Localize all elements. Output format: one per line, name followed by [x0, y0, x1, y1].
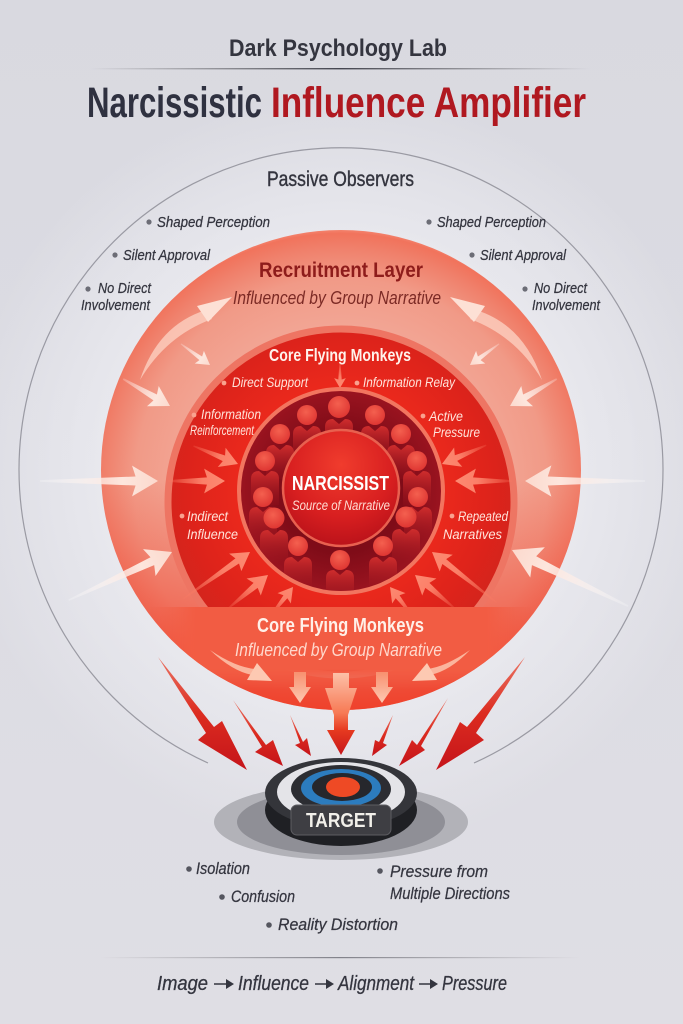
narcissist label: NARCISSIST — [292, 473, 389, 495]
narcissist centre — [283, 430, 399, 546]
main title: Narcissistic — [87, 79, 262, 127]
left observer notes: Involvement — [81, 297, 151, 314]
curved arrow right — [450, 297, 542, 380]
core role labels: Indirect — [187, 509, 229, 524]
main title — [87, 79, 586, 127]
left observer notes — [81, 214, 270, 314]
passive observers heading: Passive Observers — [267, 168, 414, 191]
right observer notes — [426, 214, 601, 314]
core role labels: Information — [201, 407, 261, 422]
panel: passive observers outer ring — [19, 148, 663, 763]
effects on target list: Pressure from — [390, 862, 488, 881]
core heading: Core Flying Monkeys — [269, 345, 411, 365]
effects on target list: Confusion — [231, 887, 295, 906]
effects on target list: Isolation — [196, 859, 250, 878]
left observer notes: No Direct — [98, 280, 152, 297]
left observer notes: Silent Approval — [123, 247, 211, 264]
curved arrow left — [140, 297, 232, 380]
red arrows to target — [158, 657, 525, 770]
panel: inner ring of followers — [239, 389, 443, 604]
lab name: Dark Psychology Lab — [229, 35, 447, 62]
header — [87, 35, 590, 127]
right observer notes: No Direct — [534, 280, 588, 297]
process flow footer: Alignment — [337, 973, 415, 995]
panel: lower core flying monkeys band — [162, 607, 520, 682]
recruitment subtitle: Influenced by Group Narrative — [233, 287, 441, 308]
effects on target list: Multiple Directions — [390, 884, 510, 903]
right observer notes: Involvement — [532, 297, 601, 314]
effects on target list: Reality Distortion — [278, 915, 398, 934]
core role labels: Direct Support — [232, 375, 309, 390]
process flow footer — [157, 973, 507, 995]
core role labels — [180, 375, 508, 542]
process flow footer: Image — [157, 973, 208, 995]
band subtitle: Influenced by Group Narrative — [235, 639, 442, 660]
right observer notes: Silent Approval — [480, 247, 567, 264]
icon: target — [214, 758, 468, 860]
panel: recruitment layer — [101, 230, 581, 710]
central arrow to target — [325, 673, 357, 755]
right observer notes: Shaped Perception — [437, 214, 546, 231]
process flow footer: Influence — [238, 973, 309, 995]
core role labels: Pressure — [433, 425, 480, 440]
core role labels: Repeated — [458, 509, 508, 524]
arrows into inner ring — [168, 361, 512, 623]
recruitment heading: Recruitment Layer — [259, 259, 423, 282]
followers — [249, 396, 432, 604]
panel: core flying monkeys layer — [168, 329, 514, 675]
core role labels: Reinforcement — [190, 423, 255, 438]
left observer notes: Shaped Perception — [157, 214, 270, 231]
narcissist subtitle: Source of Narrative — [292, 498, 390, 513]
core role labels: Information Relay — [363, 375, 456, 390]
process flow footer: Pressure — [442, 973, 507, 995]
core role labels: Influence — [187, 527, 238, 542]
arrows into recruitment layer — [40, 338, 645, 621]
band heading: Core Flying Monkeys — [257, 614, 424, 637]
effects on target list — [186, 859, 510, 934]
core role labels: Narratives — [443, 527, 502, 542]
target label — [291, 805, 391, 835]
target label: TARGET — [306, 810, 376, 832]
core role labels: Active — [428, 409, 463, 424]
arrows leaving the band — [210, 650, 470, 703]
main title: Influence Amplifier — [271, 79, 586, 127]
